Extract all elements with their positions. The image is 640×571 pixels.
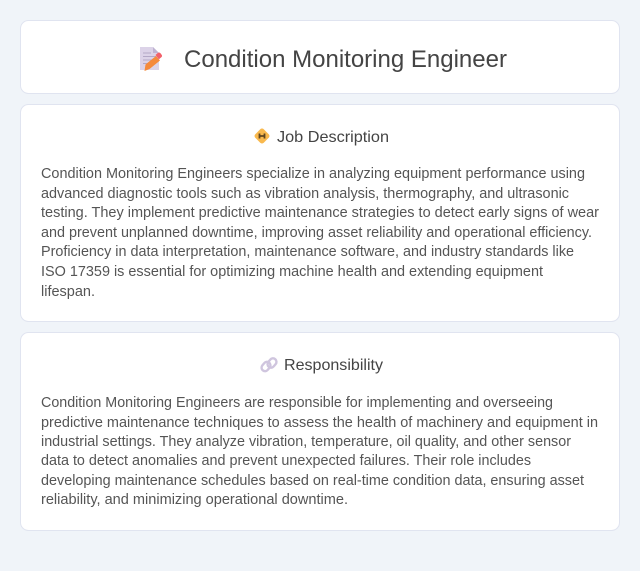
text block: job description: testing. They implement predictive maintenance strategies to detect early signs of wear (41, 205, 599, 221)
panel: job description (20, 104, 620, 322)
text block: job description: and prevent unplanned downtime, improving asset reliability and operational efficiency. (41, 225, 592, 241)
icon: chain link (260, 357, 278, 373)
heading: title: Condition Monitoring Engineer (184, 46, 507, 73)
heading: responsibility: Responsibility (284, 357, 383, 374)
text block: responsibility: data to detect anomalies and prevent unexpected failures. Their role includes (41, 453, 531, 469)
text block: job description: Proficiency in data interpretation, maintenance software, and industry standards like (41, 244, 574, 260)
text block: responsibility: predictive maintenance techniques to assess the health of machinery and equipment in (41, 415, 598, 431)
text block: job description: ISO 17359 is essential for optimizing machine health and extending equipment (41, 264, 543, 280)
panel: responsibility (20, 332, 620, 530)
panel: title (20, 20, 620, 94)
text block: job description: advanced diagnostic tools such as vibration analysis, thermography, and ultrasonic (41, 186, 569, 202)
text block: job description: lifespan. (41, 284, 95, 300)
heading: job description: Job Description (277, 129, 389, 146)
text block: responsibility (41, 395, 598, 508)
text block: responsibility: reliability, and minimizing operational downtime. (41, 492, 348, 508)
text block: responsibility: developing maintenance schedules based on real-time condition data, ensuring asset (41, 473, 584, 489)
text block: job description: Condition Monitoring Engineers specialize in analyzing equipment performance using (41, 166, 585, 182)
text block: responsibility: industrial settings. They analyze vibration, temperature, oil quality, and other sensor (41, 434, 571, 450)
text block: job description (41, 166, 599, 300)
text block: responsibility: Condition Monitoring Engineers are responsible for implementing and overseeing (41, 395, 553, 411)
icon: diamond sign (254, 128, 270, 144)
icon: document with pencil (140, 47, 162, 71)
